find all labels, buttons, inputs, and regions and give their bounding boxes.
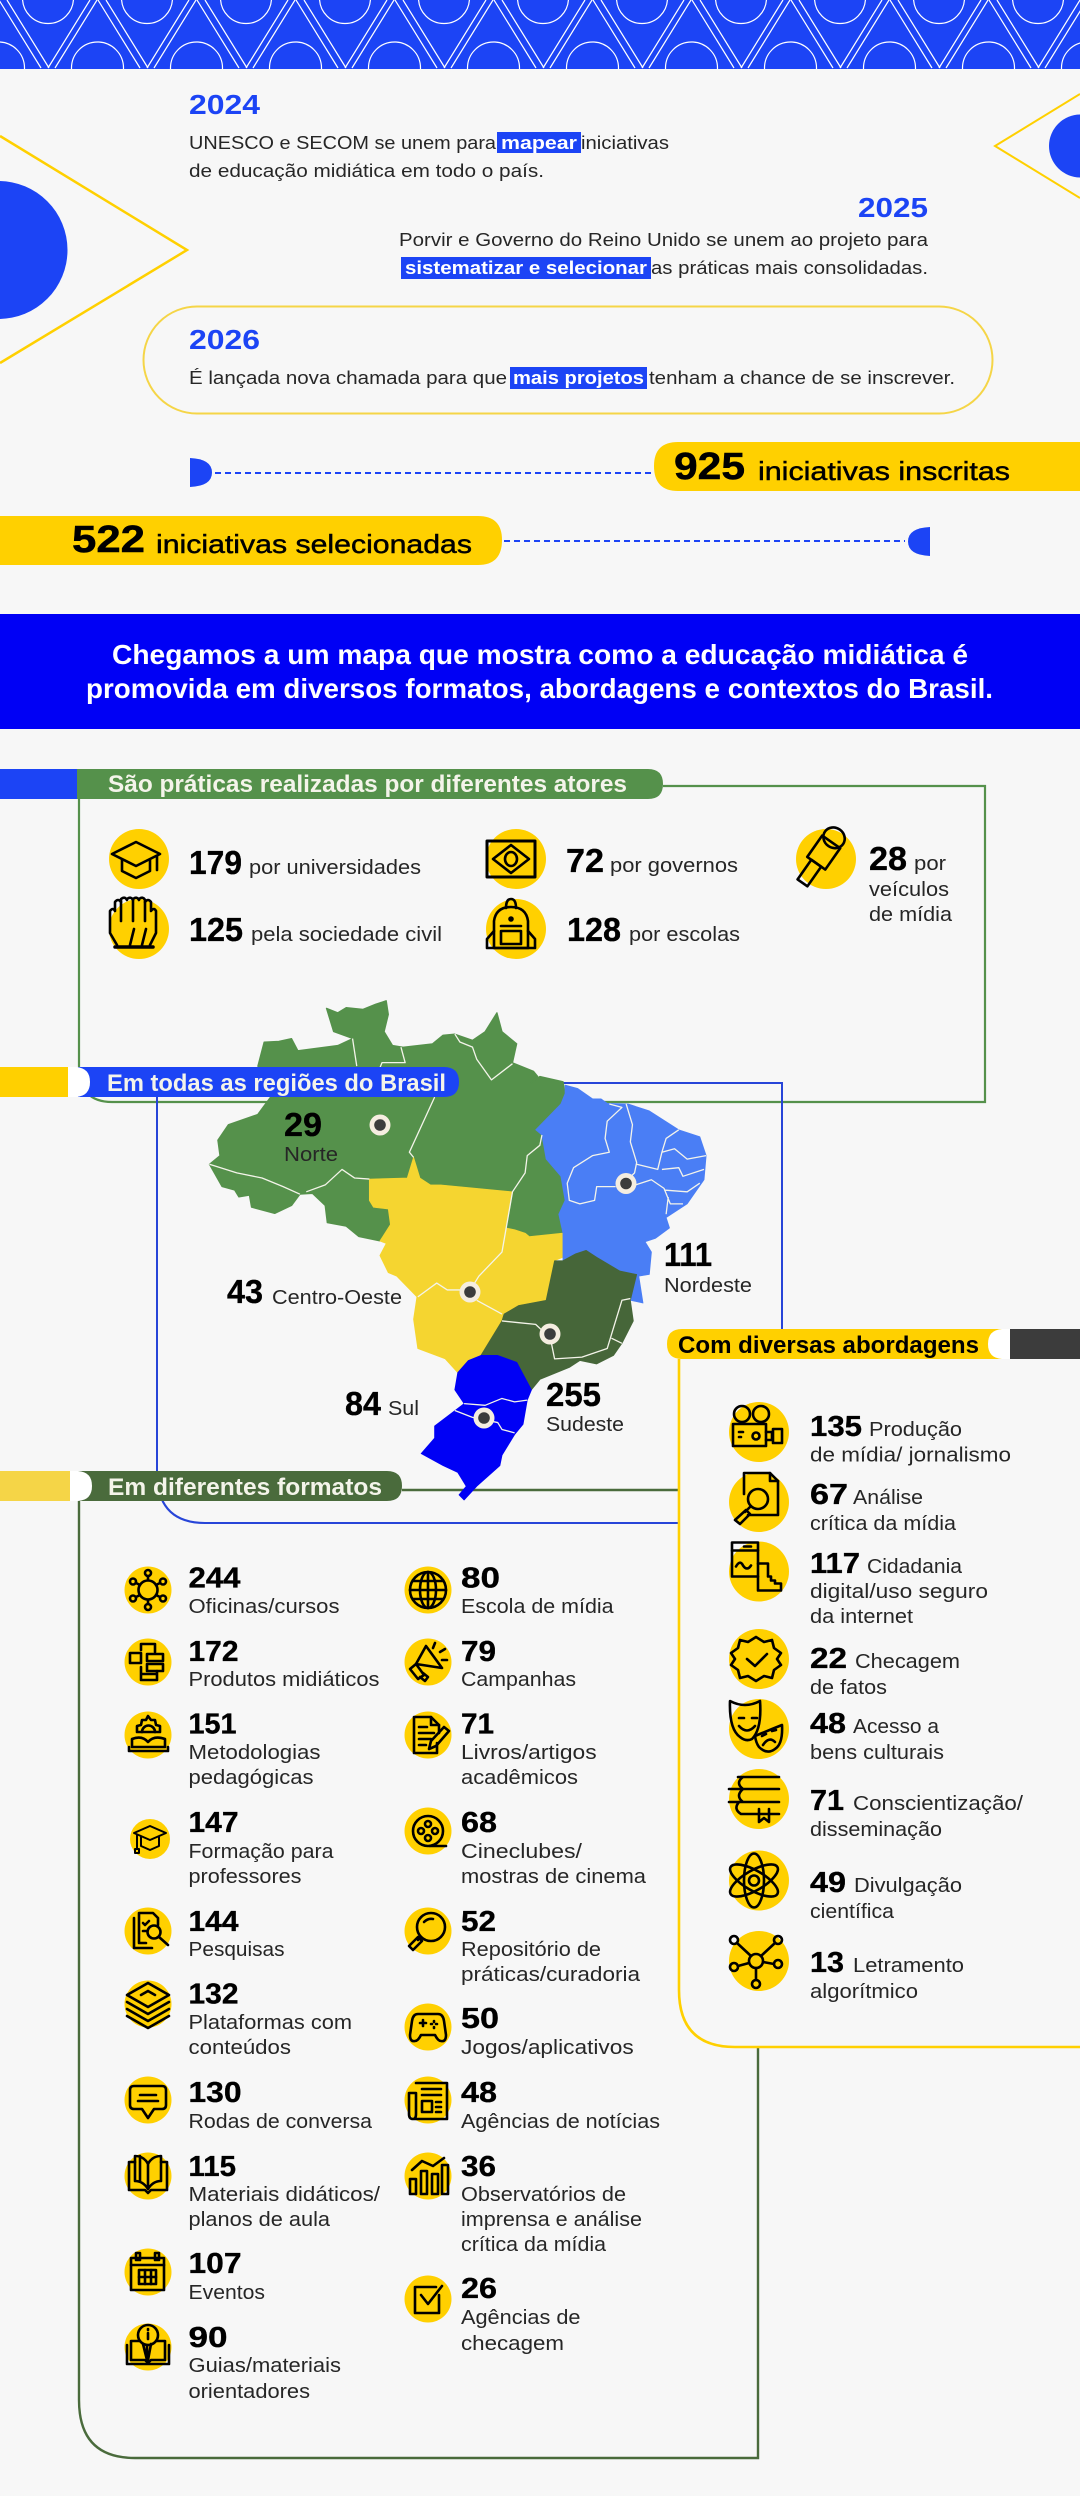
format: escola de midia: 80	[461, 1562, 500, 1594]
approach: cidadania digital: Cidadania	[867, 1556, 963, 1578]
format: rodas de conversa	[124, 2076, 373, 2133]
icon: bar chart with line	[404, 2152, 452, 2200]
icon: newspaper	[404, 2076, 452, 2124]
stat: 522 iniciativas selecionadas: 522	[72, 519, 145, 561]
approach: conscientizacao: 71	[810, 1785, 844, 1817]
approach: checagem: 22	[810, 1643, 847, 1675]
approach: letramento algoritmico: algorítmico	[810, 1981, 918, 2003]
approach: cidadania digital	[729, 1542, 988, 1628]
format: pesquisas	[124, 1906, 284, 1961]
heading: atores: São práticas realizadas por diferentes atores	[108, 771, 627, 798]
icon: check box	[404, 2276, 452, 2322]
format: livros	[404, 1708, 597, 1789]
approach: checagem: de fatos	[810, 1677, 887, 1699]
approach: cidadania digital: digital/uso seguro	[810, 1581, 988, 1603]
format: campanhas: Campanhas	[461, 1669, 576, 1691]
format: agencias de checagem: 26	[461, 2273, 497, 2305]
timeline 2025: as práticas mais consolidadas.	[651, 258, 928, 278]
icon: document search	[124, 1908, 172, 1954]
format: jogos: 50	[461, 2003, 499, 2035]
heading: abordagens	[667, 1329, 1080, 1359]
heading: regioes: Em todas as regiões do Brasil	[107, 1070, 446, 1097]
icon: film reel	[404, 1808, 452, 1854]
format: pesquisas: Pesquisas	[188, 1939, 284, 1961]
stat: veiculos de midia	[793, 823, 953, 926]
format: escola de midia: Escola de mídia	[461, 1596, 615, 1618]
format: jogos	[404, 2003, 634, 2059]
icon: graduation cap	[109, 829, 169, 889]
icon: book with info	[124, 2324, 172, 2370]
heading: atores	[0, 769, 663, 799]
map label: Sul	[345, 1385, 419, 1422]
format: metodologias	[124, 1708, 320, 1789]
format: oficinas: Oficinas/cursos	[188, 1596, 340, 1618]
format: agencias de checagem	[404, 2273, 580, 2355]
format: pesquisas: 144	[188, 1906, 238, 1938]
map label: Nordeste	[664, 1236, 752, 1297]
icon: book with gear	[124, 1712, 172, 1758]
stat: universidades: 179	[189, 844, 242, 881]
map label: Sudeste	[546, 1376, 624, 1436]
decorative diamond left	[0, 136, 187, 363]
format: cineclubes: mostras de cinema	[461, 1866, 647, 1888]
stat: veiculos de midia: 28	[869, 840, 907, 877]
timeline 2025	[399, 192, 929, 279]
format: metodologias: 151	[188, 1708, 236, 1740]
icon: document with pen	[404, 1712, 452, 1758]
approach: divulgacao cientifica: científica	[810, 1901, 895, 1923]
map label: Sudeste: Sudeste	[546, 1414, 624, 1436]
approach: checagem: Checagem	[855, 1651, 960, 1673]
stat: escolas: por escolas	[629, 924, 740, 946]
banner: Chegamos a um mapa que mostra como a educação midiática é	[112, 639, 968, 670]
stat: governos: por governos	[610, 855, 738, 877]
format: materiais didaticos: planos de aula	[188, 2209, 331, 2231]
format: rodas de conversa: 130	[188, 2077, 242, 2109]
stat: sociedade civil: pela sociedade civil	[251, 924, 442, 946]
map label: Centro-Oeste	[227, 1273, 402, 1310]
timeline 2024: de educação midiática em todo o país.	[189, 161, 544, 181]
icon: verified badge	[729, 1629, 789, 1689]
timeline 2026 pill: 2026	[189, 324, 260, 355]
timeline 2024: 2024	[189, 89, 260, 120]
timeline 2024: UNESCO e SECOM se unem para	[189, 133, 497, 153]
stat: veiculos de midia: por	[914, 853, 946, 875]
stat: veiculos de midia: veículos	[869, 879, 949, 901]
format: observatorios: crítica da mídia	[461, 2234, 607, 2256]
timeline 2026 pill: tenham a chance de se inscrever.	[649, 368, 955, 388]
timeline 2025: sistematizar e selecionar	[405, 258, 647, 278]
approach: letramento algoritmico: Letramento	[853, 1955, 964, 1977]
approach: producao: de mídia/ jornalismo	[810, 1444, 1011, 1466]
format: metodologias: pedagógicas	[188, 1767, 314, 1789]
stat: governos: 72	[566, 842, 604, 879]
stat: governos	[486, 829, 738, 889]
approach: conscientizacao	[729, 1769, 1023, 1841]
icon: network nodes	[729, 1931, 789, 1991]
approach: bens culturais: Acesso a	[853, 1716, 940, 1738]
icon: gamepad	[404, 2004, 452, 2050]
stat: universidades	[109, 829, 421, 889]
icon: magnifier	[404, 1908, 452, 1954]
heading: formatos	[0, 1471, 402, 1501]
approach: analise critica	[729, 1472, 957, 1535]
format: formacao: 147	[188, 1807, 238, 1839]
heading: formatos: Em diferentes formatos	[108, 1474, 382, 1501]
timeline 2026 pill	[144, 306, 992, 414]
format: cineclubes: 68	[461, 1807, 497, 1839]
approach: bens culturais	[729, 1699, 944, 1764]
approach: divulgacao cientifica: 49	[810, 1867, 846, 1899]
timeline 2024	[189, 89, 669, 181]
format: livros: Livros/artigos	[461, 1742, 597, 1764]
icon: speech bubble	[124, 2076, 172, 2124]
stat: 925 iniciativas inscritas: iniciativas inscritas	[758, 456, 1010, 486]
format: agencias de checagem: checagem	[461, 2333, 564, 2355]
format: campanhas	[404, 1636, 576, 1691]
icon: stacked books	[729, 1769, 789, 1829]
format: plataformas: 132	[188, 1979, 238, 2011]
header pattern band	[0, 0, 1080, 69]
format: materiais didaticos	[124, 2151, 380, 2231]
map label: Centro-Oeste: 43	[227, 1273, 263, 1310]
icon: document magnifier	[729, 1472, 789, 1532]
icon: workshop table	[124, 1566, 172, 1614]
format: livros: acadêmicos	[461, 1767, 578, 1789]
format: guias: Guias/materiais	[188, 2355, 341, 2377]
stat: escolas: 128	[567, 911, 621, 948]
format: observatorios	[404, 2151, 642, 2256]
banner: promovida em diversos formatos, abordagens e contextos do Brasil.	[86, 673, 993, 704]
approach: letramento algoritmico: 13	[810, 1947, 844, 1979]
format: repositorio: práticas/curadoria	[461, 1964, 641, 1986]
timeline 2026 pill: mais projetos	[513, 368, 644, 388]
format: formacao: professores	[188, 1866, 302, 1888]
format: observatorios: 36	[461, 2151, 496, 2183]
approach: analise critica: crítica da mídia	[810, 1513, 957, 1535]
format: guias: orientadores	[188, 2381, 310, 2403]
icon: megaphone	[404, 1638, 452, 1686]
list: formatos coluna 1	[124, 1562, 380, 2403]
format: jogos: Jogos/aplicativos	[461, 2037, 634, 2059]
format: eventos: 107	[188, 2248, 242, 2280]
format: formacao	[130, 1807, 334, 1888]
icon: layers	[124, 1980, 172, 2028]
timeline 2025: Porvir e Governo do Reino Unido se unem ao projeto para	[399, 230, 929, 250]
map of Brazil	[209, 1001, 706, 1500]
approach: bens culturais: bens culturais	[810, 1742, 944, 1764]
format: eventos: Eventos	[188, 2282, 265, 2304]
approach: conscientizacao: disseminação	[810, 1819, 942, 1841]
icon: mortarboard	[130, 1819, 170, 1859]
stat: 925 iniciativas inscritas: 925	[674, 446, 745, 488]
icon: phone with blocks	[124, 1638, 172, 1686]
timeline 2024: iniciativas	[581, 133, 669, 153]
approach: producao: 135	[810, 1411, 862, 1443]
stat: universidades: por universidades	[249, 857, 421, 879]
approach: letramento algoritmico	[729, 1931, 964, 2003]
panel border: formatos	[79, 1490, 758, 2458]
format: metodologias: Metodologias	[188, 1742, 320, 1764]
format: agencias de noticias: 48	[461, 2077, 497, 2109]
format: produtos: 172	[188, 1636, 238, 1668]
icon: calendar	[124, 2248, 172, 2296]
format: rodas de conversa: Rodas de conversa	[188, 2111, 373, 2133]
format: observatorios: Observatórios de	[461, 2184, 626, 2206]
icon: browser with steps	[729, 1542, 789, 1602]
map label: Sul: Sul	[388, 1398, 419, 1420]
stat: 522 iniciativas selecionadas: iniciativas selecionadas	[156, 529, 472, 559]
format: oficinas: 244	[188, 1562, 240, 1594]
map label: Nordeste: 111	[664, 1236, 712, 1273]
panel: abordagens	[667, 1329, 1080, 2047]
icon: open book	[124, 2152, 172, 2200]
format: guias: 90	[188, 2322, 228, 2354]
approach: divulgacao cientifica: Divulgação	[854, 1875, 962, 1897]
format: repositorio: Repositório de	[461, 1939, 601, 1961]
list: formatos coluna 2	[404, 1562, 660, 2355]
timeline 2026 pill: É lançada nova chamada para que	[189, 368, 507, 388]
format: observatorios: imprensa e análise	[461, 2209, 642, 2231]
stat: sociedade civil: 125	[189, 911, 243, 948]
approach: analise critica: Análise	[853, 1487, 923, 1509]
map label: Norte: Norte	[284, 1144, 338, 1166]
format: cineclubes	[404, 1807, 647, 1888]
format: escola de midia	[404, 1562, 615, 1618]
icon: film camera	[729, 1402, 789, 1462]
map label: Centro-Oeste: Centro-Oeste	[272, 1287, 402, 1309]
decorative diamond right	[995, 94, 1080, 198]
approach: conscientizacao: Conscientização/	[853, 1793, 1023, 1815]
format: repositorio	[404, 1906, 641, 1986]
icon: flag	[486, 829, 546, 889]
format: oficinas	[124, 1562, 340, 1618]
approach: divulgacao cientifica	[726, 1850, 962, 1923]
panel border: regioes	[157, 1083, 782, 1523]
format: repositorio: 52	[461, 1906, 496, 1938]
banner	[0, 614, 1080, 729]
format: materiais didaticos: Materiais didáticos/	[188, 2184, 380, 2206]
format: livros: 71	[461, 1708, 494, 1740]
timeline 2024: mapear	[501, 133, 577, 153]
map label: Sudeste: 255	[546, 1376, 601, 1413]
stat: veiculos de midia: de mídia	[869, 904, 953, 926]
icon: backpack	[486, 899, 546, 959]
approach: bens culturais: 48	[810, 1708, 846, 1740]
format: agencias de checagem: Agências de	[461, 2307, 580, 2329]
map label: Nordeste: Nordeste	[664, 1275, 752, 1297]
map label: Norte	[284, 1106, 338, 1166]
icon: globe	[404, 1566, 452, 1614]
approach: analise critica: 67	[810, 1479, 848, 1511]
format: plataformas: Plataformas com	[188, 2012, 352, 2034]
approach: producao	[729, 1402, 1011, 1466]
format: guias	[124, 2322, 341, 2403]
format: cineclubes: Cineclubes/	[461, 1841, 582, 1863]
format: agencias de noticias	[404, 2076, 660, 2133]
icon: theater masks	[729, 1699, 789, 1759]
approach: cidadania digital: 117	[810, 1548, 860, 1580]
format: produtos: Produtos midiáticos	[188, 1669, 380, 1691]
stat: escolas	[486, 899, 740, 959]
format: agencias de noticias: Agências de notícias	[461, 2111, 660, 2133]
timeline 2025: 2025	[858, 192, 928, 223]
stat: 522 iniciativas selecionadas	[0, 516, 930, 565]
map label: Sul: 84	[345, 1385, 382, 1422]
approach: producao: Produção	[869, 1419, 962, 1441]
approach: cidadania digital: da internet	[810, 1606, 913, 1628]
heading: abordagens: Com diversas abordagens	[678, 1332, 979, 1359]
format: formacao: Formação para	[188, 1841, 334, 1863]
icon: atom	[726, 1850, 789, 1910]
icon: raised hands	[109, 898, 169, 959]
stat: 925 iniciativas inscritas	[190, 442, 1080, 491]
format: plataformas: conteúdos	[188, 2037, 291, 2059]
format: plataformas	[124, 1979, 352, 2059]
panel: atores	[0, 769, 985, 1102]
approach: checagem	[729, 1629, 960, 1699]
map label: Norte: 29	[284, 1106, 322, 1143]
format: eventos	[124, 2248, 265, 2304]
format: materiais didaticos: 115	[188, 2151, 236, 2183]
stat: sociedade civil	[109, 898, 442, 959]
format: produtos	[124, 1636, 380, 1691]
format: campanhas: 79	[461, 1636, 496, 1668]
icon: microphone	[793, 823, 856, 889]
heading: regioes	[0, 1067, 459, 1097]
